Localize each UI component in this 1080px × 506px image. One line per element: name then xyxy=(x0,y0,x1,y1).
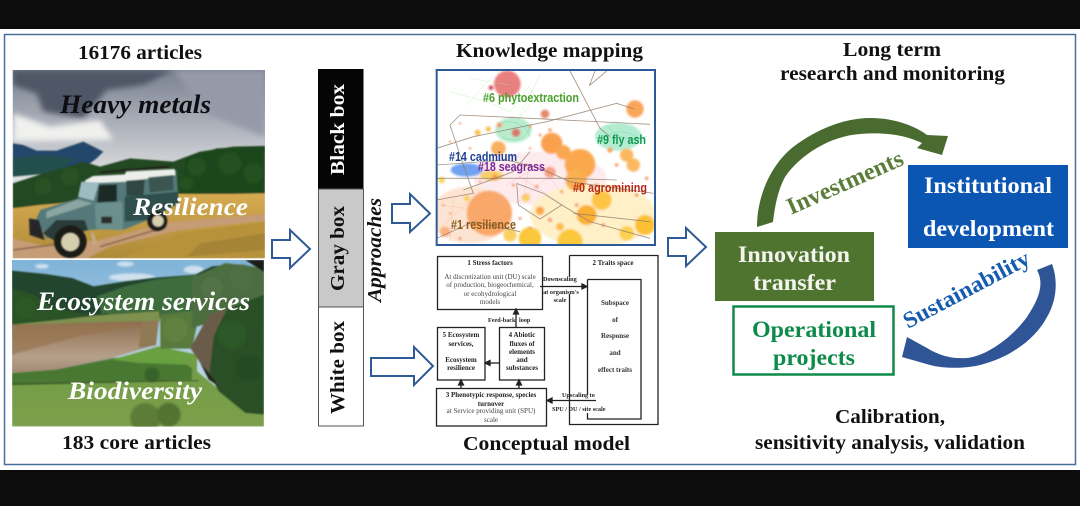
box: 4 abiotic fluxes: elements xyxy=(509,348,535,356)
box: 3 phenotypic response: scale xyxy=(484,416,498,424)
black box segment: Black box xyxy=(327,84,349,175)
box: Institutional development: Institutional xyxy=(924,173,1052,198)
arrow: photos to approaches xyxy=(272,230,310,268)
photo panel: jeep in landscape xyxy=(13,70,265,258)
box: 2 traits space: effect traits xyxy=(598,366,632,374)
approaches column xyxy=(318,69,364,426)
box: Operational projects xyxy=(734,306,894,374)
white box segment xyxy=(318,307,364,426)
cluster boundary lines xyxy=(437,71,653,238)
arrow: investments curve xyxy=(757,118,948,227)
photo label: Heavy metals: Heavy metals xyxy=(59,90,211,119)
map label: #6 phytoextraction: #6 phytoextraction xyxy=(483,91,579,105)
arrow: feed-back loop: Feed-back xyxy=(488,317,516,324)
box: 2 traits space: of xyxy=(612,316,619,324)
box: 2 traits space xyxy=(570,256,658,424)
box: 4 abiotic fluxes: fluxes of xyxy=(509,340,535,348)
box: 1 stress factors: 1 Stress factors xyxy=(467,259,513,267)
conceptual model diagram xyxy=(436,256,658,426)
arrow: to knowledge map xyxy=(392,194,430,232)
heading: 183 core articles: 183 core articles xyxy=(62,432,211,454)
map label: #9 fly ash: #9 fly ash xyxy=(597,133,646,147)
photo panel: lake and meadow xyxy=(12,260,264,433)
map label: #14 cadmium: #14 cadmium xyxy=(449,150,517,164)
arrow: downscaling: at organism's xyxy=(543,289,579,296)
photo label: Ecosystem services: Ecosystem services xyxy=(36,287,250,316)
arrow: 4 to 5 xyxy=(485,360,499,366)
box: 1 stress factors: At discretization unit (DU) scale xyxy=(444,273,536,281)
box: 1 stress factors: or ecohydrological xyxy=(464,290,516,298)
box: 4 abiotic fluxes: substances xyxy=(506,364,538,372)
box: 4 abiotic fluxes: 4 Abiotic xyxy=(509,331,535,339)
heading: Knowledge mapping: Knowledge mapping xyxy=(456,40,643,62)
bottom black band xyxy=(0,470,1080,506)
network bubbles xyxy=(438,71,654,244)
box: Operational projects: projects xyxy=(773,345,855,370)
box: 1 stress factors: of production, biogeochemical, xyxy=(446,281,534,289)
label: Investments: Investments xyxy=(783,146,908,220)
box: 2 traits space: 2 Traits space xyxy=(593,259,633,267)
box: Institutional development: development xyxy=(923,216,1054,241)
box: 5 ecosystem services: resilience xyxy=(447,364,475,372)
heading: calibration, sensitivity analysis, validation: sensitivity analysis, validation xyxy=(755,432,1025,454)
photo label: Biodiversity: Biodiversity xyxy=(67,378,203,405)
arrow: sustainability curve xyxy=(902,264,1056,368)
arrow: feed-back loop: loop xyxy=(519,317,531,324)
photo label: Resilience: Resilience xyxy=(132,194,248,221)
box: 2 traits space: and xyxy=(609,349,621,357)
box: 2 traits space: Response xyxy=(601,332,629,340)
arrow: downscaling: scale xyxy=(554,297,567,304)
box: 5 ecosystem services: services, xyxy=(448,340,474,348)
heading: long term research and monitoring: Long term xyxy=(843,39,941,61)
map label: #0 agromining: #0 agromining xyxy=(573,181,647,195)
black box segment xyxy=(318,69,364,189)
icon: jeep xyxy=(29,167,179,258)
box: Innovation transfer: transfer xyxy=(753,270,836,295)
box: 4 abiotic fluxes xyxy=(500,328,544,380)
box: 3 phenotypic response: 3 Phenotypic response, species xyxy=(446,391,537,399)
heading: 16176 articles: 16176 articles xyxy=(78,42,202,64)
map border xyxy=(437,70,655,245)
label: Sustainability: Sustainability xyxy=(899,245,1034,333)
map label: #1 resilience: #1 resilience xyxy=(451,218,516,232)
map label: #18 seagrass: #18 seagrass xyxy=(478,160,545,174)
box: Operational projects: Operational xyxy=(752,317,876,342)
box: 1 stress factors: models xyxy=(480,298,500,306)
knowledge map panel xyxy=(430,70,657,254)
box: 3 phenotypic response xyxy=(436,388,546,426)
gray box segment: Gray box xyxy=(327,206,349,291)
arrow: to conceptual model xyxy=(371,347,433,385)
heading: calibration, sensitivity analysis, validation xyxy=(755,406,1025,454)
arrow: feed-back loop xyxy=(488,309,531,327)
box: Institutional development xyxy=(908,165,1068,248)
arrow: to innovation cycle xyxy=(668,228,706,266)
white box segment: White box xyxy=(327,321,349,414)
box: 2 traits space: Subspace xyxy=(601,299,629,307)
box: 5 ecosystem services: Ecosystem xyxy=(445,356,477,364)
heading: long term research and monitoring xyxy=(780,39,1005,85)
gray box segment xyxy=(318,189,364,307)
arrow: downscaling: Downscaling xyxy=(543,276,578,283)
arrow: upscaling xyxy=(547,392,606,413)
arrow: upscaling: SPU / DU / site scale xyxy=(552,406,606,413)
heading: long term research and monitoring: research and monitoring xyxy=(780,63,1005,85)
small network nodes xyxy=(442,122,649,240)
thin network links xyxy=(440,75,647,242)
heading: Conceptual model: Conceptual model xyxy=(463,433,630,455)
heading: calibration, sensitivity analysis, validation: Calibration, xyxy=(835,406,945,428)
arrow: 3 to 4 xyxy=(516,380,522,388)
box: 3 phenotypic response: at Service providing unit (SPU) xyxy=(447,407,536,415)
box: 4 abiotic fluxes: and xyxy=(516,356,528,364)
top black band xyxy=(0,0,1080,29)
box: Innovation transfer xyxy=(715,232,874,301)
box: 5 ecosystem services xyxy=(438,328,485,380)
arrow: downscaling xyxy=(540,276,587,304)
box: 1 stress factors xyxy=(438,256,542,310)
label: Approaches: Approaches xyxy=(364,198,386,304)
box: Innovation transfer: Innovation xyxy=(738,242,850,267)
arrow: 3 to 5 xyxy=(458,380,464,388)
box: 3 phenotypic response: turnover xyxy=(478,400,504,408)
arrow: upscaling: Upscaling to xyxy=(562,392,595,399)
box: 5 ecosystem services: 5 Ecosystem xyxy=(443,331,480,339)
